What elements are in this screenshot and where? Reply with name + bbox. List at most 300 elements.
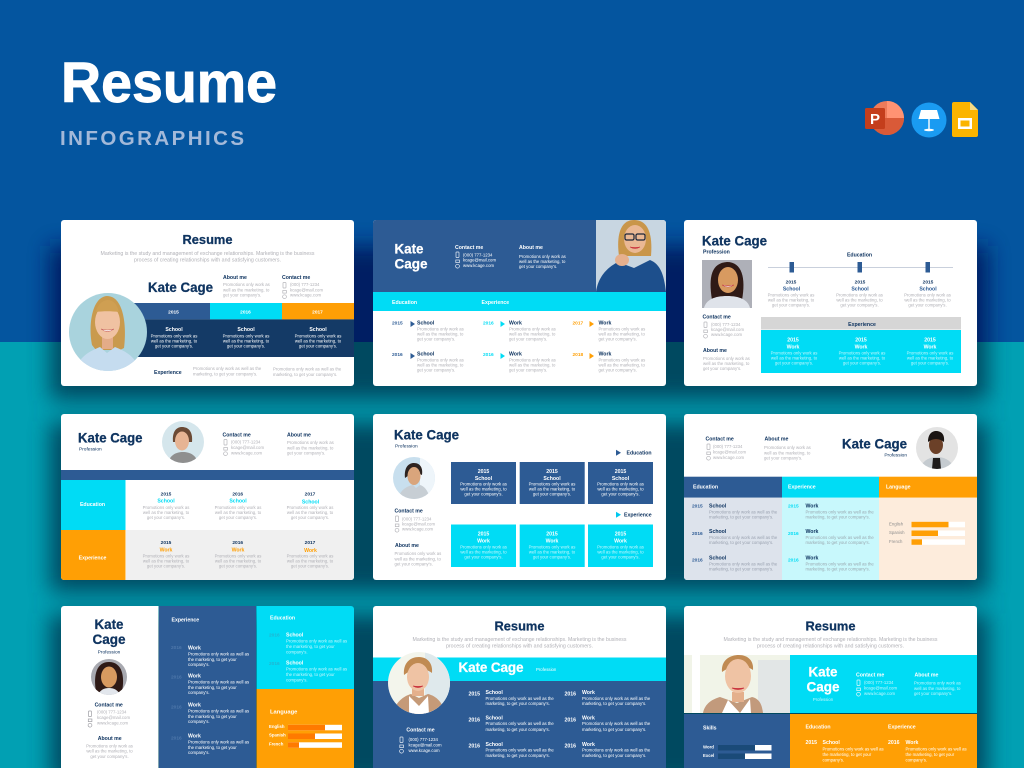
heading: Resume (182, 232, 232, 247)
orange education and experience block: 2015 (806, 740, 817, 746)
about me (764, 437, 811, 460)
experience column: Work (188, 702, 201, 708)
experience block: Work (924, 344, 937, 350)
education timeline (392, 320, 464, 372)
education row: 2017 (305, 492, 316, 498)
experience timeline left: 2016 (483, 352, 494, 358)
experience cards: Promotions only work as (597, 544, 644, 550)
school columns (151, 327, 342, 348)
education cards (451, 462, 653, 504)
experience block: well as the marketing, to (771, 356, 818, 360)
about me (287, 432, 334, 456)
education cards: 2015 (615, 469, 626, 475)
experience block: Work (787, 344, 800, 350)
about me: get your company's. (223, 293, 261, 298)
education list: School (486, 715, 503, 721)
timeline bands (120, 303, 354, 357)
experience block: 2015 (924, 338, 936, 344)
experience column: Work (188, 734, 201, 740)
experience block: Experience (848, 322, 876, 328)
education column: marketing, to get your company's. (709, 514, 773, 520)
blue body (373, 681, 666, 768)
contact me: kcage@mail.com (97, 715, 130, 720)
name: Profession (79, 447, 102, 453)
experience column: the marketing, to get your (188, 657, 237, 662)
about me: well as the marketing, to (86, 749, 133, 754)
education list: School (486, 690, 503, 696)
education timeline: 2016 (392, 352, 403, 358)
education row: get your company's. (291, 515, 329, 520)
contact me (856, 673, 897, 696)
experience column: 2016 (171, 645, 182, 651)
experience cards: get your company's. (601, 554, 640, 560)
experience label with arrow (616, 512, 652, 518)
education column: School (709, 529, 727, 535)
contact me: kcage@mail.com (402, 522, 435, 526)
name: Cage (394, 256, 428, 271)
about me: About me (395, 543, 419, 549)
about me: Promotions only work as (764, 445, 811, 450)
experience timeline left: get your company's. (509, 368, 547, 372)
about me: get your company's. (394, 562, 433, 566)
education cards: 2015 (478, 469, 489, 475)
experience list: 2016 (564, 744, 576, 750)
timeline bands: 2015 (168, 310, 179, 316)
education timeline: 2015 (786, 280, 797, 286)
name: Kate (394, 241, 424, 256)
experience column: company's. (188, 690, 210, 695)
contact me: Contact me (706, 437, 734, 443)
school columns: well as the marketing, to (223, 338, 270, 343)
experience list: marketing, to get your company's. (582, 727, 646, 732)
experience label with arrow: Experience (624, 512, 652, 518)
education cards: Promotions only work as (597, 482, 644, 486)
experience timeline right: Work (598, 320, 611, 326)
experience timeline left: well as the marketing, to (509, 362, 556, 368)
language column with bar chart: Language (886, 484, 911, 490)
education list: 2016 (468, 744, 480, 750)
experience column: company's. (188, 719, 210, 724)
experience cards: 2015 (615, 532, 626, 538)
name (806, 665, 840, 702)
education timeline: Promotions only work as (417, 358, 464, 362)
education column: Promotions only work as well as the (709, 510, 778, 514)
experience list: marketing, to get your company's. (582, 701, 646, 706)
experience cards: 2015 (546, 532, 558, 538)
education label with arrow (616, 450, 652, 456)
education row: get your company's. (219, 515, 257, 520)
experience block (761, 317, 961, 373)
experience list: 2016 (564, 718, 576, 724)
experience row: Promotions only work as well as the (193, 366, 262, 371)
experience column: 2016 (171, 736, 182, 742)
experience column: Promotions only work as well as (188, 652, 249, 656)
about me: About me (98, 736, 122, 742)
education column: School (286, 660, 304, 666)
about me: well as the marketing, to (914, 686, 961, 691)
name: Kate Cage (842, 436, 907, 451)
experience column: Work (806, 556, 818, 562)
education row (61, 480, 334, 530)
intro text: Marketing is the study and management of exchange relationships. Marketing is the business (412, 637, 627, 643)
about me: get your company's. (764, 456, 802, 460)
education column: Education (693, 484, 718, 490)
experience block: Promotions only work as (771, 350, 817, 356)
name: Profession (884, 453, 907, 459)
education row: School (229, 499, 247, 505)
about me: get your company's. (519, 264, 557, 269)
experience block: get your company's. (911, 360, 949, 366)
experience row: Promotions only work as (215, 554, 261, 558)
experience timeline left: get your company's. (509, 336, 547, 342)
skills block with bar chart: Skills (703, 726, 717, 732)
education column: the marketing, to get your (286, 672, 335, 677)
about me: well as the marketing, to (519, 259, 566, 264)
contact me: kcage@mail.com (231, 445, 264, 450)
icon: Keynote (912, 102, 946, 138)
education column: 2016 (692, 558, 703, 564)
education column (256, 606, 354, 689)
about me (394, 543, 441, 566)
intro text: process of creating relationships with and satisfying customers. (446, 644, 593, 650)
experience column: Promotions only work as well as the (806, 510, 874, 514)
about me (519, 245, 566, 269)
panel: resume slide 8 (373, 606, 666, 768)
cyan section band (373, 292, 666, 311)
timeline bands: 2016 (240, 310, 251, 316)
about me: get your company's. (287, 450, 325, 456)
about me: Promotions only work as (223, 282, 270, 287)
about me: well as the marketing, to (287, 445, 334, 450)
school columns: Promotions only work as (295, 333, 341, 338)
experience timeline right: well as the marketing, to (598, 332, 645, 336)
skills block with bar chart (684, 714, 790, 768)
orange education and experience block: Work (906, 740, 918, 746)
education row: School (302, 499, 320, 505)
experience row: Work (232, 548, 245, 554)
education list: Promotions only work as well as the (486, 748, 554, 752)
orange education and experience block: company's. (822, 758, 844, 762)
orange education and experience block: Experience (888, 724, 916, 730)
language column with bar chart: French (269, 742, 284, 746)
education row: Promotions only work as (215, 505, 261, 510)
education row: Promotions only work as (287, 505, 333, 510)
school columns: get your company's. (299, 344, 337, 348)
panel: resume slide 5 (373, 414, 666, 580)
about me: get your company's. (914, 691, 952, 696)
about me: About me (914, 673, 939, 679)
name (394, 430, 459, 448)
experience cards: get your company's. (533, 554, 571, 560)
about me: Promotions only work as (287, 440, 334, 445)
header band (373, 220, 596, 292)
intro text: process of creating relationships with and satisfying customers. (757, 644, 904, 650)
education timeline: School (417, 320, 435, 326)
cyan name band: Profession (536, 667, 557, 672)
education row: well as the marketing, to (287, 510, 334, 515)
education list: marketing, to get your company's. (486, 701, 550, 706)
about me: get your company's. (703, 366, 741, 371)
heading: Resume (806, 618, 856, 633)
contact me: (000) 777-1234 (408, 737, 438, 742)
about me: Promotions only work as (914, 680, 961, 686)
experience row: Promotions only work as (287, 554, 333, 558)
education timeline: well as the marketing, to (768, 298, 815, 302)
education label with arrow: Education (626, 450, 652, 456)
education timeline (768, 252, 953, 308)
school columns: Promotions only work as (223, 333, 269, 338)
panel: resume slide 6 (684, 414, 977, 581)
about me (914, 673, 961, 696)
name: Kate Cage (78, 430, 143, 445)
experience row: get your company's. (147, 564, 185, 568)
education cards: get your company's. (601, 492, 640, 497)
contact me: (000) 777-1234 (402, 516, 432, 522)
card shadows over blue band (37, 233, 1001, 342)
contact me: Contact me (394, 509, 423, 515)
experience timeline right: 2017 (572, 320, 584, 326)
contact me: kcage@mail.com (713, 450, 746, 454)
background: blue upper band (0, 0, 1024, 342)
about me: well as the marketing, to (223, 287, 270, 292)
experience list: Work (582, 742, 595, 748)
photo: dark-haired woman (91, 659, 127, 695)
experience timeline right: get your company's. (598, 336, 637, 342)
experience column: Promotions only work as well as (188, 708, 249, 714)
education row: get your company's. (147, 515, 185, 520)
contact me: kcage@mail.com (290, 287, 323, 292)
experience column: Work (188, 674, 201, 680)
language column with bar chart: Language (270, 710, 298, 716)
experience list: marketing, to get your company's. (582, 753, 646, 758)
experience row: Work (160, 548, 173, 554)
orange education and experience block: the marketing, to get your (906, 752, 955, 757)
experience timeline left: Promotions only work as (509, 358, 556, 362)
name: Kate (808, 665, 838, 680)
education timeline: Promotions only work as (417, 326, 464, 332)
contact me (222, 432, 264, 456)
orange education and experience block: Promotions only work as well as (906, 746, 967, 752)
name: Profession (813, 697, 834, 702)
contact me (394, 509, 435, 532)
education timeline: get your company's. (417, 368, 455, 372)
experience block: get your company's. (775, 360, 813, 366)
experience row: get your company's. (291, 564, 329, 568)
education timeline: School (417, 352, 435, 358)
language column with bar chart: Spanish (889, 530, 905, 535)
language column with bar chart: Spanish (269, 732, 286, 738)
experience block: Work (855, 344, 868, 350)
name (78, 432, 142, 450)
language column with bar chart: French (889, 539, 903, 544)
education row: Promotions only work as (143, 505, 189, 510)
education column: School (286, 632, 304, 638)
education column: marketing, to get your company's. (709, 540, 773, 545)
school columns: well as the marketing, to (295, 338, 342, 343)
contact me (455, 245, 496, 268)
education row: Education (80, 502, 105, 508)
experience cards: get your company's. (464, 554, 503, 560)
experience column: Experience (788, 484, 816, 490)
contact me: Contact me (95, 702, 123, 708)
experience cards: well as the marketing, to (460, 550, 507, 554)
experience block: 2015 (855, 338, 867, 344)
education column: Promotions only work as well as the (709, 562, 778, 566)
experience row: Experience (154, 370, 182, 376)
school columns: School (165, 327, 183, 333)
experience cards: Work (546, 538, 559, 544)
education column: School (709, 504, 727, 510)
experience row: 2017 (305, 540, 316, 546)
education column: company's. (286, 650, 308, 654)
contact me: kcage@mail.com (864, 686, 897, 690)
school columns: Promotions only work as (151, 333, 197, 338)
school columns: get your company's. (227, 344, 265, 348)
contact me (702, 315, 744, 338)
experience row: 2016 (232, 540, 243, 546)
experience column: the marketing, to get your (188, 745, 237, 750)
experience column: 2016 (788, 531, 799, 537)
orange education and experience block: Promotions only work as well as (822, 746, 884, 752)
orange education and experience block: 2016 (888, 740, 900, 746)
experience column: Promotions only work as well as (188, 680, 249, 684)
language column with bar chart (256, 689, 354, 768)
contact me: kcage@mail.com (463, 258, 496, 263)
icon: PowerPoint: P (870, 111, 880, 128)
experience row: marketing, to get your company's. (273, 372, 337, 377)
experience column: 2016 (171, 704, 182, 710)
about me: About me (519, 245, 543, 251)
education list: marketing, to get your company's. (486, 727, 550, 732)
school columns: School (309, 327, 327, 333)
panel: resume slide 3 (684, 220, 977, 386)
name: Profession (703, 250, 730, 256)
education cards: 2015 (546, 469, 558, 475)
experience timeline right: Work (598, 352, 611, 358)
education cards: Promotions only work as (460, 482, 507, 486)
contact me: (000) 777-1234 (864, 680, 894, 685)
experience timeline right: 2018 (572, 352, 584, 358)
education timeline: well as the marketing, to (836, 298, 883, 302)
cyan section band: Experience (482, 300, 509, 306)
name (842, 436, 907, 459)
name: Kate (94, 617, 124, 632)
experience row (61, 530, 354, 580)
education timeline: 2015 (923, 280, 934, 286)
experience column (159, 606, 256, 768)
experience row: well as the marketing, to (287, 558, 334, 564)
experience cards: Promotions only work as (460, 544, 507, 550)
education cards: well as the marketing, to (460, 486, 507, 492)
photo: woman in tan blazer (388, 652, 450, 714)
contact me: (000) 777-1234 (231, 440, 261, 444)
experience column: marketing, to get your company's. (806, 540, 870, 545)
education timeline: Promotions only work as (904, 292, 951, 298)
experience block: well as the marketing, to (907, 356, 954, 360)
cyan section band: Education (392, 300, 417, 306)
experience timeline right: Promotions only work as (598, 326, 645, 332)
education column: Promotions only work as well as (286, 638, 347, 644)
experience cards: Work (477, 538, 490, 544)
orange education and experience block (790, 714, 977, 768)
experience list: 2016 (564, 692, 576, 698)
name: Kate Cage (702, 233, 767, 248)
experience list: Work (582, 690, 595, 696)
panel: resume slide 4 (61, 414, 354, 580)
photo: woman with dark skin (916, 427, 958, 469)
education cards: School (612, 476, 630, 482)
subtitle: INFOGRAPHICS (60, 127, 244, 150)
experience column: Work (806, 529, 818, 535)
education cards: well as the marketing, to (597, 486, 644, 492)
experience cards (451, 524, 653, 567)
experience block: well as the marketing, to (839, 356, 886, 360)
icon: Google Slides (952, 102, 978, 137)
experience timeline left: Promotions only work as (509, 326, 556, 332)
education cards: School (475, 476, 493, 482)
about me: About me (703, 348, 727, 354)
education list: 2015 (468, 692, 480, 698)
name: Profession (395, 444, 418, 450)
experience column: Work (806, 504, 818, 510)
experience timeline left (483, 320, 556, 372)
experience timeline right: get your company's. (598, 368, 637, 372)
about me: Promotions only work as (703, 356, 750, 361)
education column: Education (270, 616, 295, 622)
about me: well as the marketing, to (764, 450, 811, 455)
contact me: Contact me (282, 275, 310, 281)
experience cards: Work (614, 538, 627, 544)
experience row: get your company's. (219, 564, 257, 568)
photo: dark-haired woman (702, 260, 752, 308)
experience column: 2016 (788, 558, 799, 564)
education timeline: get your company's. (772, 302, 810, 308)
experience list: Promotions only work as well as the (582, 721, 651, 726)
experience row: Promotions only work as well as the (273, 366, 342, 372)
contact me: Contact me (455, 245, 483, 251)
contact me: www.kcage.com (231, 450, 262, 456)
contact me: kcage@mail.com (408, 742, 442, 748)
language column with bar chart: English (269, 724, 285, 729)
education column: Promotions only work as well as (286, 666, 347, 672)
experience row (154, 366, 342, 377)
contact me: www.kcage.com (713, 455, 744, 460)
education timeline: School (919, 286, 937, 292)
photo: businesswoman in grey suit (393, 457, 435, 499)
skills block with bar chart: Word (703, 744, 714, 750)
contact me (88, 702, 130, 727)
experience timeline right (572, 320, 645, 372)
contact me (706, 437, 746, 460)
contact me: (000) 777-1234 (290, 282, 320, 287)
experience block: 2015 (787, 338, 799, 344)
contact me: (000) 777-1234 (713, 444, 743, 449)
intro text: process of creating relationships with and satisfying customers. (134, 258, 281, 264)
orange education and experience block: Education (806, 724, 831, 730)
experience timeline right: well as the marketing, to (598, 362, 645, 368)
contact me: www.kcage.com (290, 293, 321, 298)
contact me: www.kcage.com (711, 332, 742, 337)
name: Cage (92, 632, 126, 647)
experience timeline left: 2016 (483, 320, 494, 326)
experience cards: well as the marketing, to (529, 550, 576, 554)
photo: smiling blonde woman (69, 293, 147, 371)
experience row: well as the marketing, to (215, 558, 262, 564)
education column: Promotions only work as well as the (709, 535, 778, 540)
experience column: company's. (188, 750, 210, 755)
card shadows over teal band (36, 342, 1002, 768)
experience column: Promotions only work as well as (188, 740, 249, 744)
